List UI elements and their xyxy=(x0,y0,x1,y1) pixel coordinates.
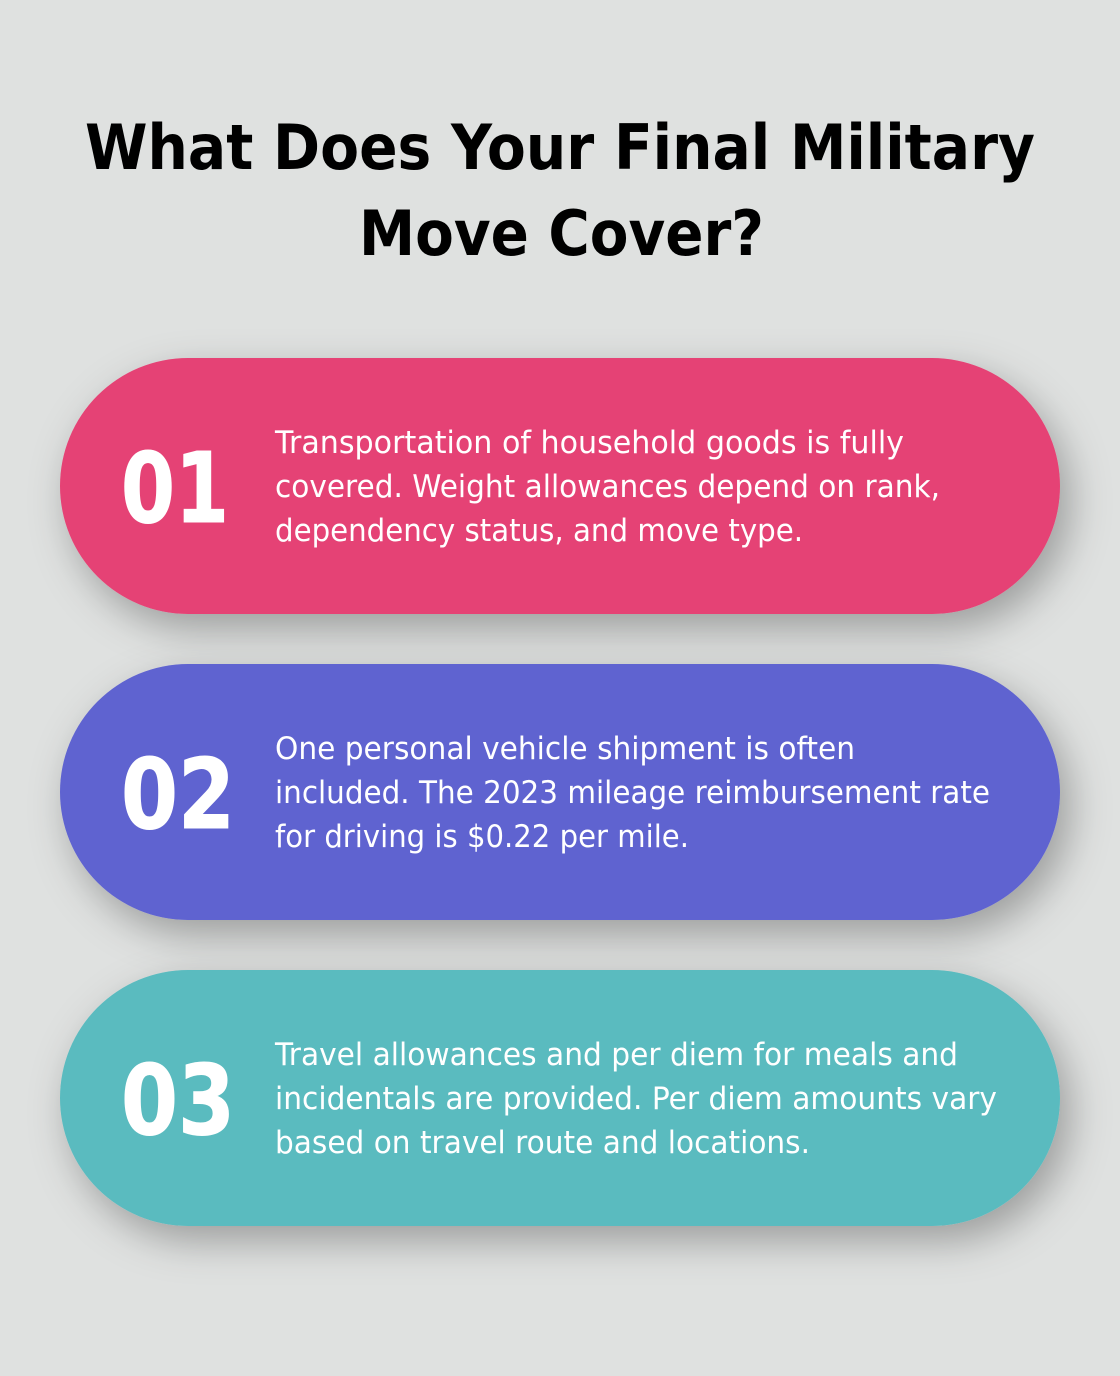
text: step 03 description: based on travel route and locations. xyxy=(275,1125,810,1161)
title: What Does Your Final Military xyxy=(85,111,1035,184)
number: 02: 02 xyxy=(121,738,235,851)
number: 03: 03 xyxy=(121,1044,235,1157)
text: step 03 description: Travel allowances and per diem for meals and xyxy=(274,1037,958,1073)
pill: step 02 background xyxy=(60,664,1060,920)
text: step 02 description: included. The 2023 mileage reimbursement rate xyxy=(275,775,990,811)
panel: step 02 xyxy=(60,664,1060,920)
text: step 01 description: dependency status, and move type. xyxy=(275,513,803,549)
pill: step 01 background xyxy=(60,358,1060,614)
text: step 01 description: covered. Weight allowances depend on rank, xyxy=(275,469,940,505)
text: step 02 description xyxy=(275,731,990,855)
text: step 02 description: One personal vehicle shipment is often xyxy=(275,731,855,767)
pill: step 03 background xyxy=(60,970,1060,1226)
title xyxy=(85,111,1035,270)
number: 01: 01 xyxy=(121,432,229,545)
text: step 01 description: Transportation of household goods is fully xyxy=(274,425,904,461)
text: step 03 description xyxy=(274,1037,997,1161)
panel: step 01 xyxy=(60,358,1060,614)
text: step 02 description: for driving is $0.22 per mile. xyxy=(275,819,689,855)
title: Move Cover? xyxy=(359,197,764,270)
panel: step 03 xyxy=(60,970,1060,1226)
text: step 01 description xyxy=(274,425,940,549)
text: step 03 description: incidentals are provided. Per diem amounts vary xyxy=(275,1081,997,1117)
